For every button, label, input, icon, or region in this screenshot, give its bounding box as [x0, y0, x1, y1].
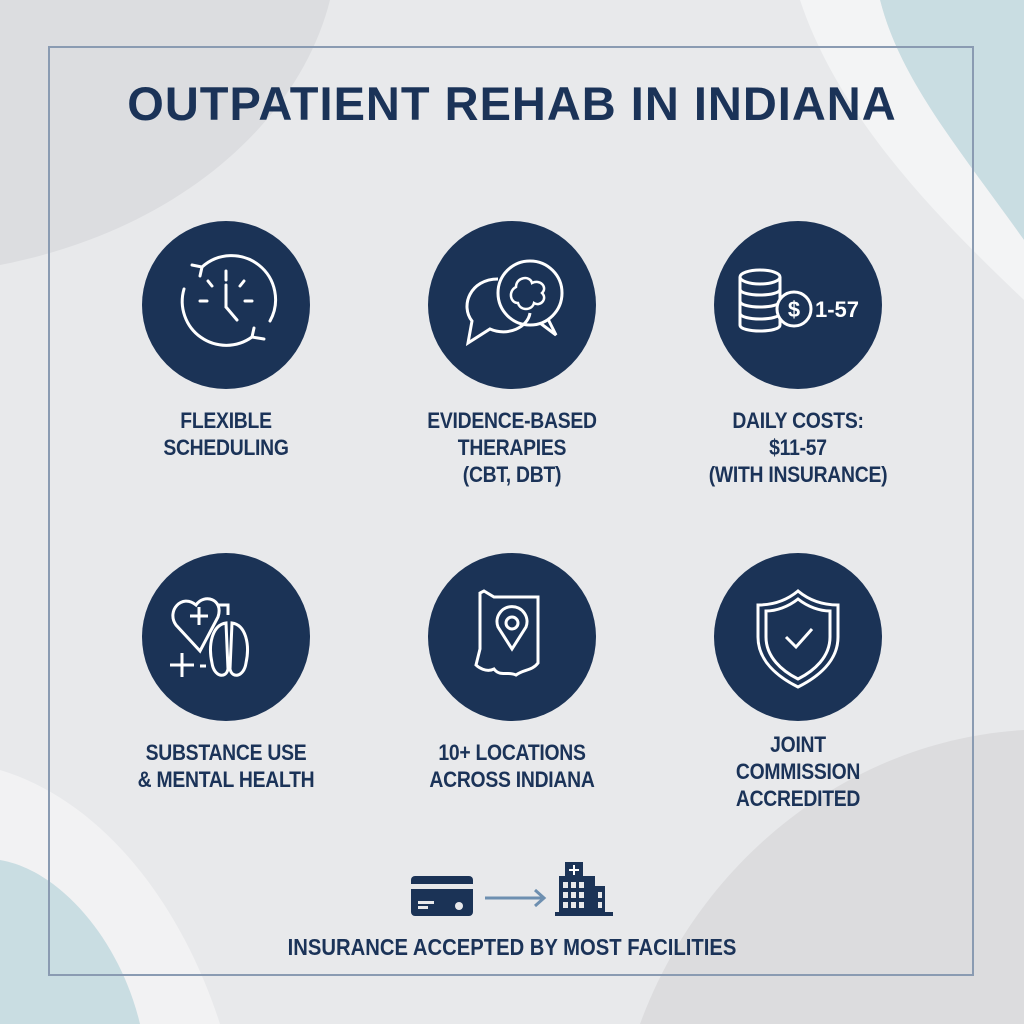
- label: substance use: & MENTAL HEALTH: [138, 767, 314, 792]
- icon: coins cost: 1-57: [815, 297, 859, 322]
- label: joint commission: ACCREDITED: [736, 786, 860, 811]
- title: OUTPATIENT REHAB IN INDIANA: [127, 77, 897, 130]
- label: locations: 10+ LOCATIONS: [438, 740, 586, 765]
- label: joint commission: JOINT: [770, 732, 826, 757]
- label: locations: [429, 740, 595, 792]
- label: locations: ACROSS INDIANA: [429, 767, 595, 792]
- icon: coins cost: $: [788, 297, 800, 322]
- icon: indiana map pin: [428, 553, 596, 721]
- label: evidence-based therapies: EVIDENCE-BASED: [427, 408, 597, 433]
- label: daily costs: $11-57: [769, 435, 827, 460]
- icon: heart and brain: [142, 553, 310, 721]
- label: evidence-based therapies: THERAPIES: [458, 435, 566, 460]
- footer text: INSURANCE ACCEPTED BY MOST FACILITIES: [288, 934, 736, 960]
- icon: coins cost: [714, 221, 882, 389]
- label: flexible scheduling: [163, 408, 289, 460]
- label: substance use: [138, 740, 314, 792]
- label: daily costs: [709, 408, 887, 487]
- icon: insurance card to hospital: [411, 862, 613, 916]
- label: daily costs: (WITH INSURANCE): [709, 462, 887, 487]
- icon: shield check: [714, 553, 882, 721]
- label: joint commission: COMMISSION: [736, 759, 860, 784]
- label: flexible scheduling: SCHEDULING: [163, 435, 289, 460]
- label: flexible scheduling: FLEXIBLE: [180, 408, 272, 433]
- icon: flexible scheduling clock: [142, 221, 310, 389]
- label: substance use: SUBSTANCE USE: [146, 740, 306, 765]
- label: daily costs: DAILY COSTS:: [732, 408, 864, 433]
- label: evidence-based therapies: [427, 408, 597, 487]
- icon: therapy speech bubbles brain: [428, 221, 596, 389]
- label: joint commission: [736, 732, 860, 811]
- label: evidence-based therapies: (CBT, DBT): [463, 462, 561, 487]
